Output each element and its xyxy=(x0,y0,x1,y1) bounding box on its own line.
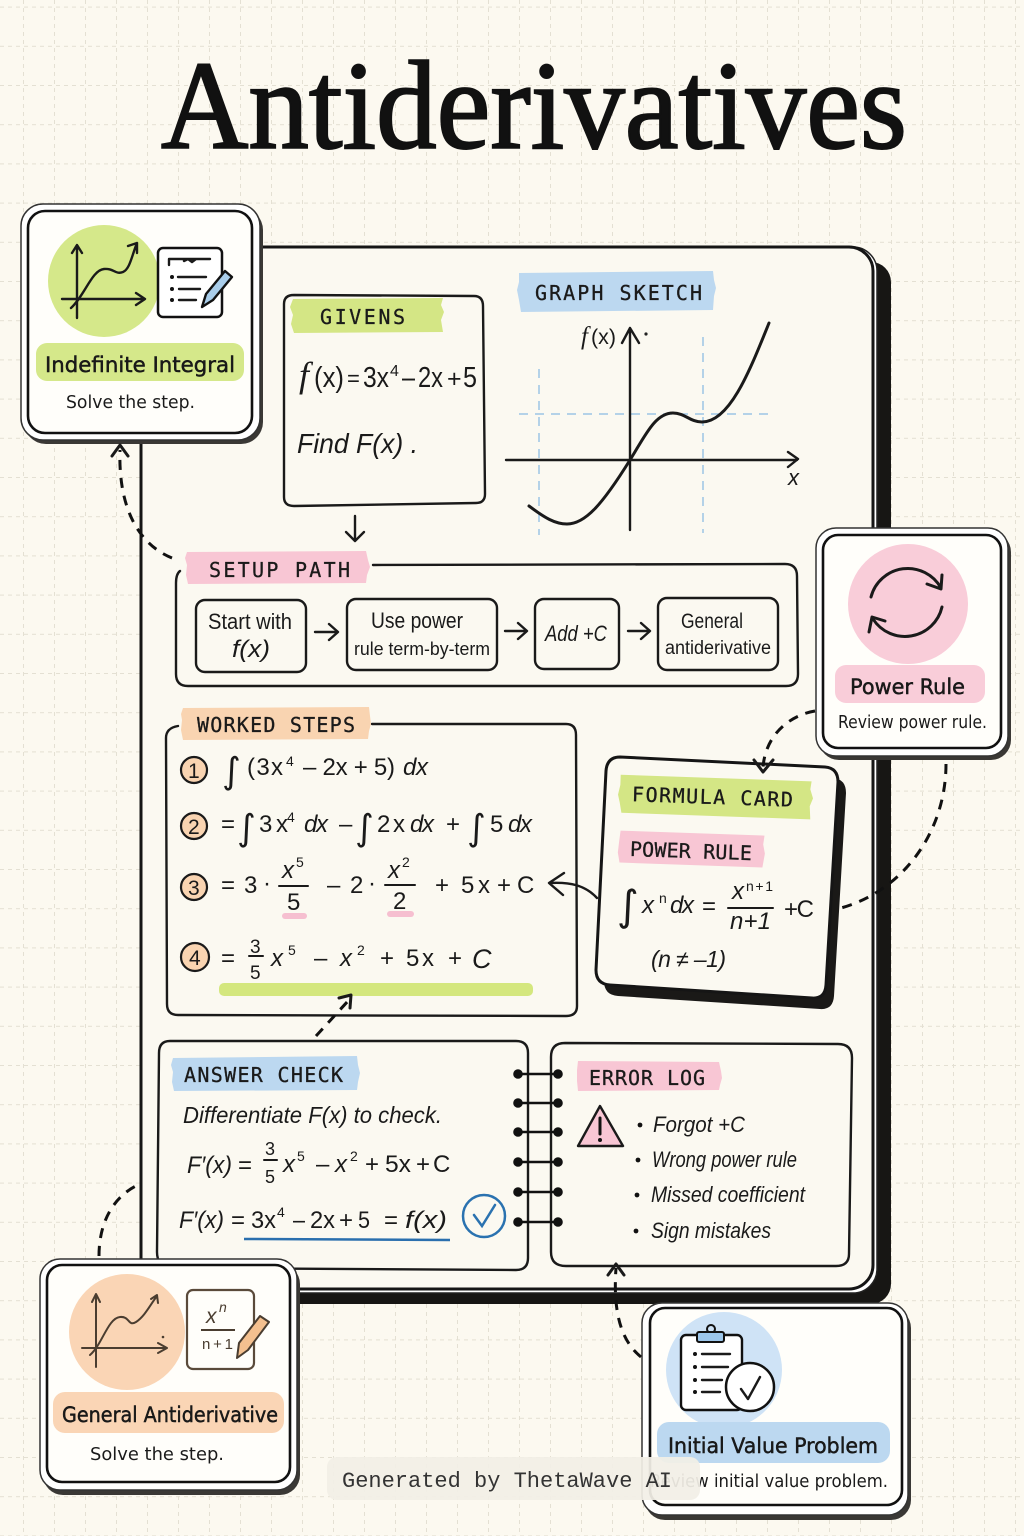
step 2: = xyxy=(221,811,235,838)
heading: givens tape xyxy=(290,298,444,333)
formula: power rule: +C xyxy=(784,896,814,923)
title: Antiderivatives xyxy=(161,37,907,176)
formula: F prime expanded: x xyxy=(282,1151,296,1178)
formula: F prime expanded: + xyxy=(365,1151,379,1178)
formula: F prime expanded: 5x xyxy=(385,1151,411,1178)
formula: f(x) definition: – xyxy=(402,362,416,394)
formula: power rule: x xyxy=(641,892,655,919)
step 3: 3 xyxy=(244,872,257,899)
formula: f(x) definition: 5 xyxy=(463,362,477,394)
heading: worked steps tape: WORKED STEPS xyxy=(197,713,355,737)
formula: F prime simplified: 2x xyxy=(310,1207,335,1234)
formula: F prime expanded: C xyxy=(433,1151,450,1178)
formula: f(x) definition: (x) xyxy=(314,362,344,394)
formula: F prime expanded: 3 xyxy=(265,1139,275,1159)
heading: setup path tape xyxy=(185,551,370,584)
formula: power rule: n xyxy=(659,890,667,906)
icon: warning triangle xyxy=(578,1106,623,1146)
step 3: + xyxy=(435,872,449,899)
formula: f(x) definition: f xyxy=(299,355,314,395)
label: f(x) axis: f xyxy=(581,323,591,350)
pill: initial value problem: Initial Value Problem xyxy=(668,1434,878,1458)
step 2: – xyxy=(339,811,353,838)
formula: power rule: ∫ xyxy=(617,881,639,930)
step 2: + xyxy=(446,811,460,838)
card: power rule xyxy=(816,528,1011,760)
text: differentiate: Differentiate F(x) to check. xyxy=(183,1102,442,1128)
card: initial value problem xyxy=(642,1303,911,1520)
step 4: 5 xyxy=(250,963,261,984)
arrow: givens to setup xyxy=(346,516,364,541)
icon: orange graph xyxy=(69,1274,185,1390)
arrow: formula card to step 3 xyxy=(549,873,597,898)
panel: answer check xyxy=(157,1041,528,1270)
formula: f(x) definition: 2x xyxy=(418,362,443,394)
step 2: 5 xyxy=(490,811,503,838)
step 3: + xyxy=(497,872,511,899)
icon: check circle xyxy=(463,1195,505,1237)
card: indefinite integral xyxy=(21,204,263,444)
step 4: x xyxy=(270,945,284,972)
formula: f(x) definition: 4 xyxy=(390,363,399,380)
text: solve the step: Solve the step. xyxy=(90,1444,224,1465)
icon: formula note and pencil: n xyxy=(219,1299,227,1315)
heading: formula card tape: FORMULA CARD xyxy=(632,782,793,812)
step box: add C: Add +C xyxy=(543,621,607,646)
step 1: (3x xyxy=(247,754,283,781)
formula: power rule: x xyxy=(731,878,745,905)
step 4: 5x xyxy=(406,945,434,972)
formula: F prime expanded: = xyxy=(238,1152,252,1179)
step box: start with f(x) xyxy=(196,600,306,672)
card: general antiderivative xyxy=(40,1259,300,1495)
arrow: answer check to worked steps xyxy=(316,995,351,1036)
text: solve the step: Solve the step. xyxy=(66,392,195,413)
step box: general antiderivative xyxy=(658,598,778,670)
step box: general antiderivative: General xyxy=(681,610,743,633)
step 3: = xyxy=(221,872,235,899)
formula: F prime simplified: F′(x) xyxy=(179,1207,224,1234)
heading: graph sketch tape: GRAPH SKETCH xyxy=(535,281,702,305)
icon: green graph xyxy=(48,225,160,337)
arrow: power card to formula card xyxy=(754,711,815,772)
step 1: dx xyxy=(403,754,429,781)
icon: formula note and pencil: x xyxy=(205,1305,218,1328)
arrow xyxy=(628,623,650,639)
formula: power rule: n+1 xyxy=(746,878,773,894)
formula: power rule: n + 1 xyxy=(730,908,771,935)
heading: setup path tape: SETUP PATH xyxy=(209,558,350,582)
step 3: – xyxy=(327,872,341,899)
formula: f(x) definition xyxy=(299,355,477,395)
step 2: dx xyxy=(410,811,435,838)
text: error list xyxy=(634,1112,806,1243)
panel: formula card xyxy=(596,757,846,1009)
step 4: 4 xyxy=(189,947,201,970)
step 4: 3 xyxy=(250,937,261,958)
heading: answer check tape xyxy=(171,1056,360,1091)
pill: initial value problem xyxy=(657,1422,890,1463)
formula: F prime expanded: 5 xyxy=(265,1167,275,1187)
arrow xyxy=(315,624,338,640)
step box: use power rule: rule term-by-term xyxy=(354,639,490,659)
panel: givens xyxy=(284,295,485,506)
text: error list: Sign mistakes xyxy=(651,1218,771,1243)
icon: document and pencil xyxy=(158,248,232,317)
step box: use power rule: Use power xyxy=(371,608,463,633)
step 1: ∫ xyxy=(222,751,241,792)
step 4: + xyxy=(380,945,394,972)
formula: F prime simplified: = xyxy=(231,1207,245,1234)
step 2: 4 xyxy=(287,809,295,825)
step 4: 5 xyxy=(288,942,296,958)
step 3: · xyxy=(263,870,271,897)
formula: F prime simplified: = xyxy=(384,1207,398,1234)
text: n not equal -1: (n ≠ –1) xyxy=(651,946,726,972)
step 2: 3x xyxy=(259,811,288,838)
panel: error log xyxy=(551,1043,852,1266)
step 3: 2 xyxy=(402,854,410,870)
step box: general antiderivative: antiderivative xyxy=(665,638,771,659)
label: f(x) axis: (x) xyxy=(591,326,616,349)
formula: f(x) definition: 3x xyxy=(363,362,389,394)
step 3 xyxy=(181,854,534,919)
step 3: · xyxy=(368,870,376,897)
step 2: ∫ xyxy=(467,808,486,849)
step box: use power rule xyxy=(347,599,497,670)
step 3: 2 xyxy=(393,888,406,915)
formula: F prime expanded: + xyxy=(416,1151,430,1178)
step 1: 4 xyxy=(286,753,294,769)
step 3: x xyxy=(281,857,295,884)
step 4: = xyxy=(221,945,235,972)
heading: formula card tape xyxy=(617,775,814,819)
panel: worked steps xyxy=(166,707,577,1016)
step 3: 3 xyxy=(188,877,200,900)
panel: setup path xyxy=(176,551,798,686)
formula: F prime simplified: + xyxy=(339,1207,353,1234)
step 2: 2x xyxy=(377,811,405,838)
watermark xyxy=(327,1457,700,1500)
heading: answer check tape: ANSWER CHECK xyxy=(184,1063,343,1087)
chart: graph sketch xyxy=(506,271,800,535)
formula: F prime simplified: 4 xyxy=(277,1204,285,1220)
label: f(x) axis xyxy=(581,323,616,350)
formula: F prime simplified: 5 xyxy=(358,1207,370,1234)
formula: F prime expanded: x xyxy=(334,1151,348,1178)
heading: error log tape xyxy=(577,1061,722,1091)
step 3: x xyxy=(387,857,401,884)
formula: F prime expanded: 2 xyxy=(350,1148,358,1164)
formula: F prime expanded xyxy=(187,1139,450,1187)
step 3: 5 xyxy=(287,889,300,916)
step box: add C xyxy=(535,599,619,669)
step 2: ∫ xyxy=(237,808,256,849)
heading: power rule tape: POWER RULE xyxy=(630,837,752,865)
text: error list: Wrong power rule xyxy=(652,1147,797,1172)
text: error list: Forgot +C xyxy=(653,1112,745,1137)
step 4 xyxy=(181,937,533,996)
step 3: 5 xyxy=(296,854,304,870)
step 1: 1 xyxy=(188,760,200,783)
step 4: + xyxy=(448,945,462,972)
step 1: – 2x + 5) xyxy=(303,754,395,781)
formula: F prime expanded: – xyxy=(316,1151,330,1178)
step 2 xyxy=(181,808,533,849)
icon: clipboard with check xyxy=(666,1312,782,1428)
text: error list: Missed coefficient xyxy=(651,1182,806,1207)
step 3: 2 xyxy=(350,872,363,899)
icon: formula note and pencil: n+1 xyxy=(202,1336,233,1353)
panel: notebook page xyxy=(141,247,891,1304)
arrow: formula card to power card xyxy=(841,764,946,908)
step 2: dx xyxy=(304,811,329,838)
formula: F prime expanded: F′(x) xyxy=(187,1152,232,1179)
label: x axis: x xyxy=(787,465,800,490)
heading: graph sketch tape xyxy=(517,271,716,312)
step 2: ∫ xyxy=(355,808,374,849)
heading: power rule tape xyxy=(617,830,766,868)
pill: general antiderivative xyxy=(53,1392,284,1433)
step 4: x xyxy=(339,945,353,972)
formula: F prime simplified: f(x) xyxy=(405,1207,447,1234)
text: review power rule: Review power rule. xyxy=(838,712,987,733)
step 2: 2 xyxy=(188,816,200,839)
heading: givens tape: GIVENS xyxy=(320,305,405,329)
formula: F prime simplified: – xyxy=(293,1207,306,1234)
heading: worked steps tape xyxy=(181,707,371,740)
pill: power rule: Power Rule xyxy=(850,675,965,699)
step 4: 2 xyxy=(357,942,365,958)
formula: F prime simplified xyxy=(179,1204,450,1240)
step box: start with f(x): f(x) xyxy=(232,636,270,663)
heading: error log tape: ERROR LOG xyxy=(589,1066,705,1090)
formula: F prime expanded: 5 xyxy=(297,1148,305,1164)
binding rings xyxy=(514,1070,562,1226)
text: find F(x): Find F(x) . xyxy=(297,428,418,459)
arrow: general card to answer check xyxy=(99,1184,140,1256)
step 2: dx xyxy=(508,811,533,838)
step 4: C xyxy=(472,944,492,974)
step 3: C xyxy=(517,872,534,899)
icon: formula note and pencil xyxy=(187,1290,269,1369)
arrow: setup to indefinite card xyxy=(112,445,172,558)
icon: refresh cycle xyxy=(848,544,968,664)
formula: power rule xyxy=(617,878,814,935)
arrow: initial value card to error log xyxy=(608,1264,641,1357)
pill: general antiderivative: General Antiderivative xyxy=(62,1403,278,1427)
formula: f(x) definition: = xyxy=(347,366,360,391)
pill: indefinite integral xyxy=(36,343,244,381)
arrow xyxy=(505,623,527,639)
step box: start with f(x): Start with xyxy=(208,609,292,634)
formula: power rule: = xyxy=(702,893,716,920)
step 3: 5x xyxy=(461,872,490,899)
formula: f(x) definition: + xyxy=(447,365,462,393)
step 4: – xyxy=(314,945,328,972)
text: review initial value problem: Review initial value problem. xyxy=(650,1471,888,1492)
pill: power rule xyxy=(835,665,985,703)
formula: F prime simplified: 3x xyxy=(251,1207,276,1234)
watermark: Generated by ThetaWave AI xyxy=(342,1469,672,1494)
formula: power rule: dx xyxy=(670,892,695,919)
pill: indefinite integral: Indefinite Integral xyxy=(45,353,235,377)
step 1 xyxy=(181,751,429,792)
